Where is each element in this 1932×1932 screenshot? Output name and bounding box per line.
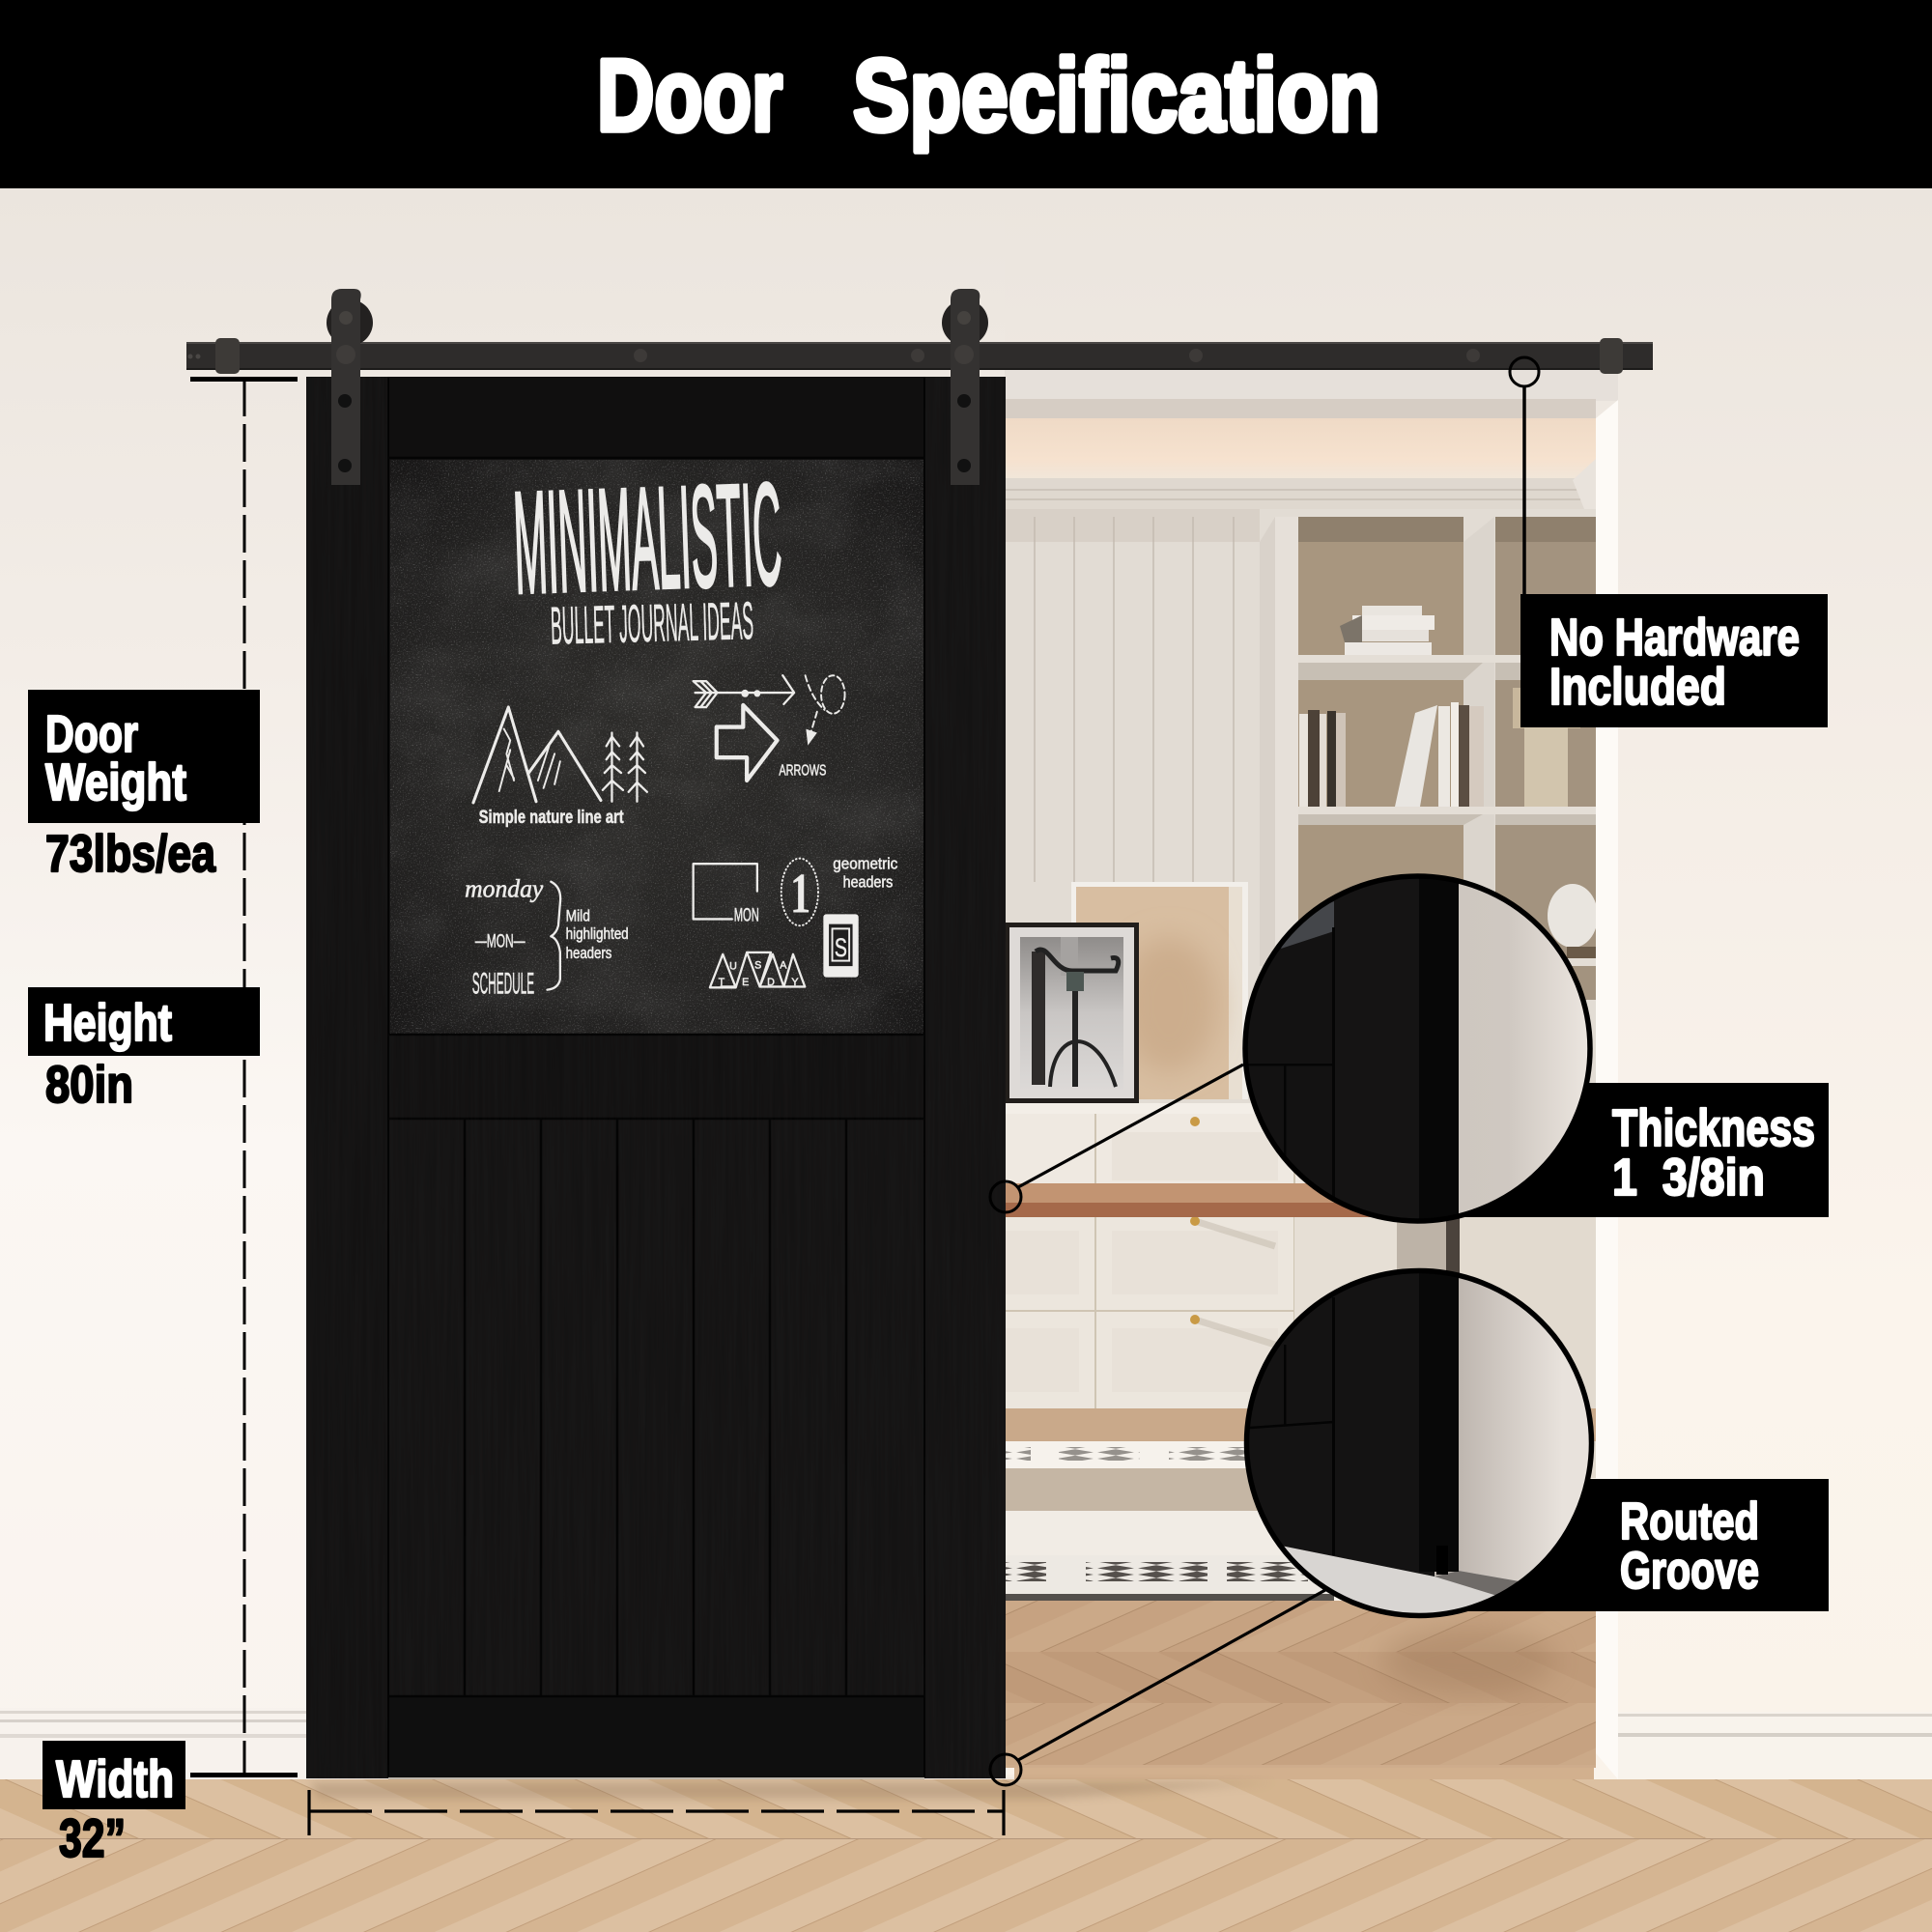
framed bicycle photograph [1005, 923, 1139, 1103]
chalk drawings [465, 675, 897, 1001]
magnifier: door thickness detail [1236, 869, 1599, 1228]
label: no hardware included: No Hardware [1549, 609, 1800, 667]
magnifier: routed groove detail [1236, 1265, 1599, 1623]
baseboards [0, 1708, 1932, 1779]
barn door [306, 377, 1006, 1779]
left hanger strap [327, 289, 373, 485]
bookshelf [1260, 509, 1598, 1118]
chalk drawings: D [767, 977, 775, 988]
title: Door [597, 39, 782, 153]
label: routed groove [1459, 1479, 1829, 1611]
chalk drawings: U [729, 961, 737, 973]
chalk drawings: S [835, 932, 847, 962]
chalk drawings: —MON— [475, 930, 526, 952]
chalk drawings: SCHEDULE [472, 966, 534, 1001]
track stop left [215, 338, 240, 374]
callout leader: thickness [990, 1065, 1243, 1212]
title: Specification [853, 39, 1380, 153]
right door jamb [1596, 400, 1618, 1779]
label: width [43, 1741, 185, 1868]
label: thickness: Thickness [1612, 1099, 1815, 1157]
width dimension line [309, 1790, 1004, 1835]
chalk lettering [465, 452, 897, 1001]
label: height [28, 987, 260, 1114]
door rails and stiles [306, 377, 1006, 1779]
label: thickness [1459, 1083, 1829, 1217]
sliding track rail [186, 342, 1653, 370]
label: door weight [28, 690, 260, 883]
books middle shelf [1299, 702, 1484, 807]
sculptural lamp [1513, 688, 1580, 807]
chalk drawings: E [742, 977, 749, 988]
interior floor [1006, 1408, 1605, 1769]
label: routed groove: Routed [1620, 1492, 1759, 1550]
label: door weight: 73lbs/ea [45, 825, 216, 883]
chalk lettering: BULLET JOURNAL IDEAS [550, 590, 754, 656]
chalk drawings: ARROWS [779, 762, 826, 779]
cabinets [1006, 1103, 1596, 1478]
label: height: 80in [45, 1056, 133, 1114]
label: no hardware included [1520, 594, 1828, 727]
chalk drawings: highlighted [566, 925, 629, 943]
chalk drawings: T [719, 977, 725, 988]
callout leader: hardware [1510, 357, 1539, 594]
chalk drawings: geometric [833, 855, 897, 873]
chalk drawings: headers [566, 945, 611, 962]
chalk drawings: Y [791, 977, 799, 988]
panelled wall [1006, 509, 1281, 1108]
rug [1006, 1441, 1334, 1601]
label: routed groove: Groove [1620, 1542, 1759, 1600]
white vase [1548, 884, 1598, 966]
label: height: Height [43, 994, 172, 1052]
label: width: Width [56, 1750, 174, 1808]
label: door weight: Door [45, 705, 138, 763]
right hanger strap [942, 289, 988, 485]
label: thickness: 1 3/8in [1612, 1149, 1765, 1207]
wood counter shelf [1006, 1183, 1370, 1217]
chalk drawings: Mild [566, 907, 590, 925]
label: no hardware included: Included [1549, 658, 1726, 716]
chalk drawings: MON [734, 904, 759, 925]
chalkboard panel [390, 452, 924, 1035]
title [0, 0, 1932, 188]
view through doorway [1005, 399, 1605, 1769]
chalk drawings: 1 [790, 862, 810, 925]
chalk drawings: monday [465, 874, 544, 903]
floor [0, 1765, 1932, 1932]
chalk drawings: headers [843, 873, 893, 892]
tan art print [1071, 882, 1248, 1099]
barn door: MINIMALISTIC [511, 452, 784, 624]
label: door weight: Weight [45, 753, 186, 811]
track stop right [1600, 338, 1623, 374]
height dimension line [190, 377, 298, 1777]
chalk drawings: Simple nature line art [479, 807, 624, 828]
label: width: 32” [59, 1807, 126, 1868]
ceiling recess and glow [1006, 399, 1596, 509]
books upper shelf [1340, 606, 1435, 655]
chalk drawings: A [780, 959, 787, 972]
chalk drawings: S [754, 959, 761, 972]
callout leader: routed groove [990, 1590, 1325, 1785]
